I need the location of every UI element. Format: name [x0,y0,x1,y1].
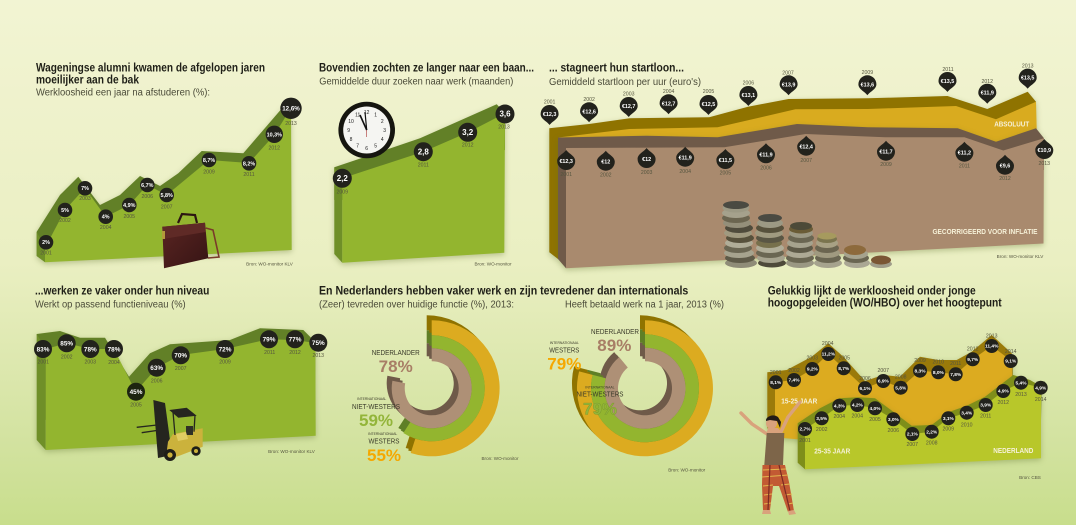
markers 15-25 jaar: 9,2% [807,367,818,373]
marker 2005 [122,198,137,220]
donut chart [572,315,713,456]
markers 25-35 jaar: 4,9% [998,389,1009,395]
marker absoluut 2013 [1019,64,1037,89]
markers 25-35 jaar [798,376,1048,448]
marker inflatie 2002: 2002 [600,172,612,178]
subtitle: (Zeer) tevreden over huidige functie (%), 2013: [319,299,514,310]
marker inflatie 2007: 2007 [800,158,812,164]
icon: clock: 1 [374,112,377,118]
icon: clock: 2 [381,119,384,125]
icon: briefcase [162,214,219,268]
markers 25-35 jaar: 3,5% [816,416,828,422]
marker 2003: 2003 [85,360,96,366]
markers 25-35 jaar: 4,0% [870,406,881,412]
source: Bron: WO-monitor [474,262,512,266]
marker 2009: 72% [219,346,232,353]
marker inflatie 2002: €12 [601,160,610,166]
marker 2013: 3,6 [499,110,511,119]
marker 2003 [78,181,92,202]
markers 15-25 jaar: 2006 [859,376,871,382]
marker 2007: 5,8% [161,193,173,199]
marker 2009: 2,2 [337,174,348,183]
markers 15-25 jaar: 2012 [967,346,979,352]
icon: clock [338,102,395,158]
source: Bron: WO-monitor [668,468,706,472]
marker 2001: 2001 [40,250,52,256]
marker inflatie 2004: 2004 [679,169,691,175]
markers 15-25 jaar: 6,9% [878,379,889,385]
icon: clock: 3 [383,128,386,134]
label niet-westers [576,386,624,418]
marker inflatie 2007 [797,136,815,164]
marker absoluut 2009: €13,6 [861,82,874,88]
marker 2001: 2% [42,240,50,246]
marker absoluut 2004: €12,7 [662,101,675,107]
source: Bron: WO-monitor KLV [997,254,1044,259]
marker 2006: 63% [150,365,163,372]
marker 2006: 2006 [142,194,153,200]
heading: Nederlanders vs internationals: En Nederlanders hebben vaker werk en zijn tevredener dan internationals [319,285,688,297]
marker 2001: 2001 [38,360,49,366]
subtitle: Heeft betaald werk na 1 jaar, 2013 (%) [565,299,724,310]
marker absoluut 2004: 2004 [663,89,674,95]
marker absoluut 2001: €12,3 [543,112,556,118]
markers 15-25 jaar: 7,8% [950,372,962,378]
marker inflatie 2013: 2013 [1039,161,1050,167]
marker absoluut 2013: 2013 [1022,64,1034,70]
icon: coin stacks [722,201,892,268]
marker 2012: 2012 [462,142,474,148]
marker 2013 [496,104,514,130]
marker 2013: 2013 [285,121,297,127]
markers 15-25 jaar: 2010 [933,360,944,366]
marker absoluut 2002: €12,6 [582,109,596,115]
marker 2002 [58,334,76,360]
label gecorrigeerd: GECORRIGEERD VOOR INFLATIE [932,229,1038,236]
markers 25-35 jaar: 2001 [799,438,811,444]
marker inflatie 2009 [877,141,895,168]
markers 15-25 jaar: 6,1% [860,386,871,392]
marker 2004 [105,340,123,366]
marker 2009 [216,340,234,366]
markers 25-35 jaar: 5,4% [1016,380,1027,386]
label niet-westers: INTERNATIONAAL [357,397,386,401]
marker inflatie 2007: €12,4 [799,145,813,151]
marker inflatie 2002 [597,151,615,178]
markers 15-25 jaar: 2014 [1005,349,1017,355]
panel: werkloosheid jonge hoogopgeleiden [741,285,1048,515]
marker inflatie 2005: 2005 [720,170,731,176]
marker 2007 [159,188,174,210]
markers 25-35 jaar: 2010 [961,422,973,428]
title: Wageningse alumni kwamen de afgelopen jaren [36,63,265,75]
panel: functieniveau [34,285,327,461]
marker 2012: 3,2 [462,128,474,137]
title: ...werken ze vaker onder hun niveau [35,285,209,297]
marker absoluut 2001 [541,100,559,125]
markers 25-35 jaar: 4,9% [1035,385,1047,391]
label niet-westers: NIET-WESTERS [576,392,624,399]
icon: clock: 5 [374,144,377,150]
icon: forklift [137,400,203,461]
label niet-westers [352,397,400,430]
markers 15-25 jaar: 11,4% [985,344,999,350]
marker 2011: 8,2% [243,161,255,167]
marker 2007: 70% [174,353,187,360]
icon: clock: 7 [356,144,359,150]
label nederlander: NEDERLANDER [591,329,639,336]
marker absoluut 2009 [858,70,876,95]
label westers [547,341,581,374]
marker 2004: 2004 [108,360,120,366]
area chart: 15-25 jaar [767,335,1013,440]
marker 2004: 78% [108,346,121,353]
markers 15-25 jaar: 7,4% [789,378,800,384]
marker absoluut 2012 [978,79,996,104]
markers 15-25 jaar: 8,3% [915,368,926,374]
marker 2005: 2005 [124,214,135,220]
marker 2013: 2013 [498,124,510,130]
markers 25-35 jaar: 2,7% [800,427,811,433]
marker absoluut 2001: 2001 [544,100,555,106]
marker absoluut 2012: €11,9 [981,91,994,97]
marker absoluut 2012: 2012 [982,79,993,85]
marker 2009: 8,7% [203,158,215,164]
marker 2009: 2009 [219,360,231,366]
marker inflatie 2012 [996,155,1014,182]
label westers: WESTERS [549,348,580,354]
marker 2002: 2002 [59,218,71,224]
markers 25-35 jaar: 3,1% [943,416,954,422]
marker 2012: 2012 [269,146,280,152]
marker 2006 [140,178,155,200]
panel: tevredenheid donut [319,299,519,465]
source: Bron: WO-monitor KLV [246,262,294,266]
markers 25-35 jaar: 2011 [980,414,991,420]
marker 2001: 83% [37,346,50,353]
label westers: 55% [367,446,401,465]
marker 2012: 10,3% [267,132,282,138]
subtitle: Werkloosheid een jaar na afstuderen (%): [36,88,210,99]
source: Bron: WO-monitor KLV [268,449,316,454]
marker 2011: 2011 [243,172,255,178]
marker 2003: 2003 [79,196,91,202]
title: Gelukkig lijkt de werkloosheid onder jonge [768,285,976,297]
marker absoluut 2003 [620,92,638,117]
marker absoluut 2006: 2006 [743,80,754,86]
marker inflatie 2011: 2011 [959,164,970,170]
markers 15-25 jaar: 2011 [950,361,961,367]
label nederlander [591,329,639,355]
marker 2013 [309,334,327,359]
panel: betaald werk donut [547,299,724,472]
markers 25-35 jaar: 4,3% [834,403,845,409]
marker 2001 [39,235,53,256]
marker 2004: 4% [102,215,110,221]
marker 2005 [127,383,145,408]
subtitle: Werkt op passend functieniveau (%) [35,299,186,310]
marker 2002: 2002 [61,354,73,360]
marker inflatie 2012: 2012 [999,176,1011,182]
markers 15-25 jaar: 8,0% [933,370,944,376]
markers 25-35 jaar: 2009 [943,426,954,432]
marker absoluut 2005 [700,89,718,115]
markers 15-25 jaar: 2002 [788,368,800,374]
marker 2013 [280,98,302,127]
label westers [367,432,401,465]
marker 2011: 79% [263,337,276,344]
markers 15-25 jaar: 9,1% [1005,359,1017,365]
label nederlander: NEDERLANDER [372,350,420,357]
icon: clock: 10 [348,119,354,125]
marker absoluut 2004 [660,89,678,114]
label 15-25 jaar: 15-25 JAAR [781,398,817,406]
label niet-westers: 59% [359,411,393,430]
marker 2006: 6,7% [141,183,154,189]
label niet-westers: NIET-WESTERS [352,404,400,411]
subtitle: Gemiddelde duur zoeken naar werk (maanden) [319,76,513,87]
marker absoluut 2011: 2011 [942,67,954,73]
marker 2013: 12,6% [282,106,300,112]
marker inflatie 2001: €12,3 [559,159,573,165]
label westers: INTERNATIONAAL [550,341,579,345]
label nederlander: 78% [379,357,413,376]
source: Bron: CBS [1019,475,1041,480]
marker inflatie 2004: €11,9 [679,156,692,162]
marker 2012: 2012 [289,350,301,356]
icon: clock: 6 [365,146,368,152]
marker absoluut 2013: €13,5 [1021,76,1034,82]
panel: werkloosheid alumni [36,63,302,268]
marker 2011: 2011 [264,350,275,356]
markers 25-35 jaar: 2004 [834,414,845,420]
marker 2009: 2009 [203,170,215,176]
markers 25-35 jaar: 3,0% [888,417,899,423]
area chart: absoluut [549,92,1037,259]
marker 2011 [242,156,256,178]
label nederland: NEDERLAND [993,448,1033,455]
markers 25-35 jaar: 2008 [926,440,938,446]
marker inflatie 2012: €9,6 [1000,164,1010,170]
marker 2004 [98,209,113,231]
marker 2007: 2007 [175,366,187,372]
marker inflatie 2009: 2009 [880,162,892,168]
marker absoluut 2006 [739,80,757,106]
markers 15-25 jaar: 2009 [914,358,926,364]
marker absoluut 2007 [780,70,798,95]
marker inflatie 2003: €12 [642,157,651,163]
marker absoluut 2003: €12,7 [622,104,635,110]
markers 15-25 jaar: 2013 [986,334,998,340]
area chart: gecorrigeerd voor inflatie [558,124,1044,268]
markers 25-35 jaar: 2007 [907,442,918,448]
title: Bovendien zochten ze langer naar een baan... [319,63,534,75]
marker 2007 [172,346,190,372]
marker 2011: 2011 [418,162,429,168]
markers 25-35 jaar: 3,4% [961,410,973,416]
marker 2009 [202,153,216,176]
marker 2001 [34,340,52,366]
icon: woman stretching [741,402,800,515]
title: ... stagneert hun startloon... [549,63,684,75]
marker 2012 [266,126,283,152]
area chart [37,328,316,450]
marker 2006 [148,359,166,384]
panel: startloon [541,63,1053,268]
markers 15-25 jaar: 2001 [770,370,782,376]
area chart [37,107,292,262]
label westers: WESTERS [368,438,400,446]
markers 15-25 jaar: 8,1% [770,380,782,386]
markers 25-35 jaar: 2006 [888,428,899,434]
marker absoluut 2007: 2007 [782,70,794,76]
marker 2012 [458,123,477,148]
markers 25-35 jaar: 2,1% [907,432,918,438]
marker inflatie 2006: 2006 [760,166,772,172]
label absoluut: ABSOLUUT [994,122,1030,129]
marker absoluut 2006: €13,1 [742,93,755,99]
icon: clock: 12 [364,110,370,116]
marker 2003: 7% [81,186,89,192]
markers 25-35 jaar: 4,2% [852,403,863,409]
label nederlander: 89% [597,336,631,355]
label niet-westers: INTERNATIONAAL [585,386,615,390]
icon: clock: 11 [355,112,361,118]
markers 15-25 jaar: 9,7% [967,357,979,363]
marker inflatie 2009: €11,7 [879,150,893,156]
marker 2005: 4,9% [123,203,136,209]
marker 2012: 77% [289,337,302,344]
marker 2002: 85% [60,341,73,348]
marker 2009 [333,169,352,196]
marker 2002: 5% [61,208,69,214]
markers 25-35 jaar: 2004 [852,414,863,420]
marker 2006: 2006 [151,378,163,384]
marker inflatie 2001 [557,150,575,178]
marker inflatie 2006 [757,143,775,172]
subtitle: Gemiddeld startloon per uur (euro's) [549,77,701,88]
icon: clock: 4 [381,137,384,143]
marker 2007: 2007 [161,204,173,210]
label westers: 79% [547,354,581,374]
title line 2: hoogopgeleiden (WO/HBO) over het hoogtepunt [768,298,1002,310]
marker inflatie 2001: 2001 [560,172,572,178]
marker 2004: 2004 [100,225,112,231]
marker inflatie 2005: €11,5 [719,158,732,164]
marker absoluut 2005: 2005 [703,89,714,95]
markers 15-25 jaar: 5,8% [895,385,907,391]
marker inflatie 2003 [638,148,656,176]
markers 25-35 jaar: 2014 [1035,397,1047,403]
markers 25-35 jaar: 2002 [816,427,828,433]
marker absoluut 2007: €13,9 [782,82,795,88]
source: Bron: WO-monitor [481,456,519,461]
marker 2003 [81,340,99,366]
donut chart [387,315,500,456]
markers 15-25 jaar: 2003 [807,356,818,362]
marker inflatie 2003: 2003 [641,170,652,176]
marker 2009: 2009 [337,190,348,196]
markers 25-35 jaar: 3,9% [980,403,992,409]
marker 2003: 78% [84,346,97,353]
marker inflatie 2004 [676,147,694,175]
label 25-35 jaar: 25-35 JAAR [814,448,850,456]
icon: clock: 9 [347,128,350,134]
marker absoluut 2002 [580,97,598,122]
marker 2002 [58,203,72,224]
markers 15-25 jaar: 2008 [895,374,907,380]
marker absoluut 2011 [938,67,956,92]
marker 2012 [286,330,304,356]
markers 25-35 jaar: 2005 [869,417,881,423]
panel: zoekduur [319,63,534,266]
markers 15-25 jaar: 8,7% [838,366,850,372]
marker absoluut 2011: €13,5 [941,79,954,85]
marker inflatie 2011: €11,2 [958,151,971,157]
marker 2011 [414,142,433,168]
area chart: 25-35 jaar [798,375,1042,469]
markers 15-25 jaar: 2007 [878,368,889,374]
markers 15-25 jaar: 2005 [839,356,850,362]
marker 2005: 45% [130,389,143,396]
label nederlander [372,350,420,376]
markers 25-35 jaar: 2012 [998,400,1009,406]
marker 2005: 2005 [130,402,142,408]
title line 2: moeilijker aan de bak [36,74,140,86]
area chart [334,104,505,263]
icon: clock: 8 [350,137,353,143]
marker inflatie 2013: €10,9 [1038,148,1051,154]
marker 2011: 2,8 [418,147,429,156]
markers 25-35 jaar: 2013 [1015,392,1027,398]
marker inflatie 2005 [716,149,734,176]
label westers: INTERNATIONAAL [368,432,397,436]
marker absoluut 2002: 2002 [583,97,595,103]
marker absoluut 2003: 2003 [623,92,635,98]
marker absoluut 2005: €12,5 [702,102,715,108]
markers 25-35 jaar: 2,2% [926,429,938,435]
markers 15-25 jaar: 11,2% [822,352,836,358]
marker inflatie 2013 [1035,139,1053,167]
marker inflatie 2011 [955,142,973,170]
marker absoluut 2009: 2009 [862,70,873,76]
markers 15-25 jaar [769,334,1018,395]
marker 2011 [260,330,278,356]
marker 2013: 75% [312,340,325,347]
marker inflatie 2006: €11,9 [759,152,773,158]
marker 2013: 2013 [313,353,324,359]
markers 15-25 jaar: 2004 [822,341,834,347]
label niet-westers: 79% [583,400,617,418]
